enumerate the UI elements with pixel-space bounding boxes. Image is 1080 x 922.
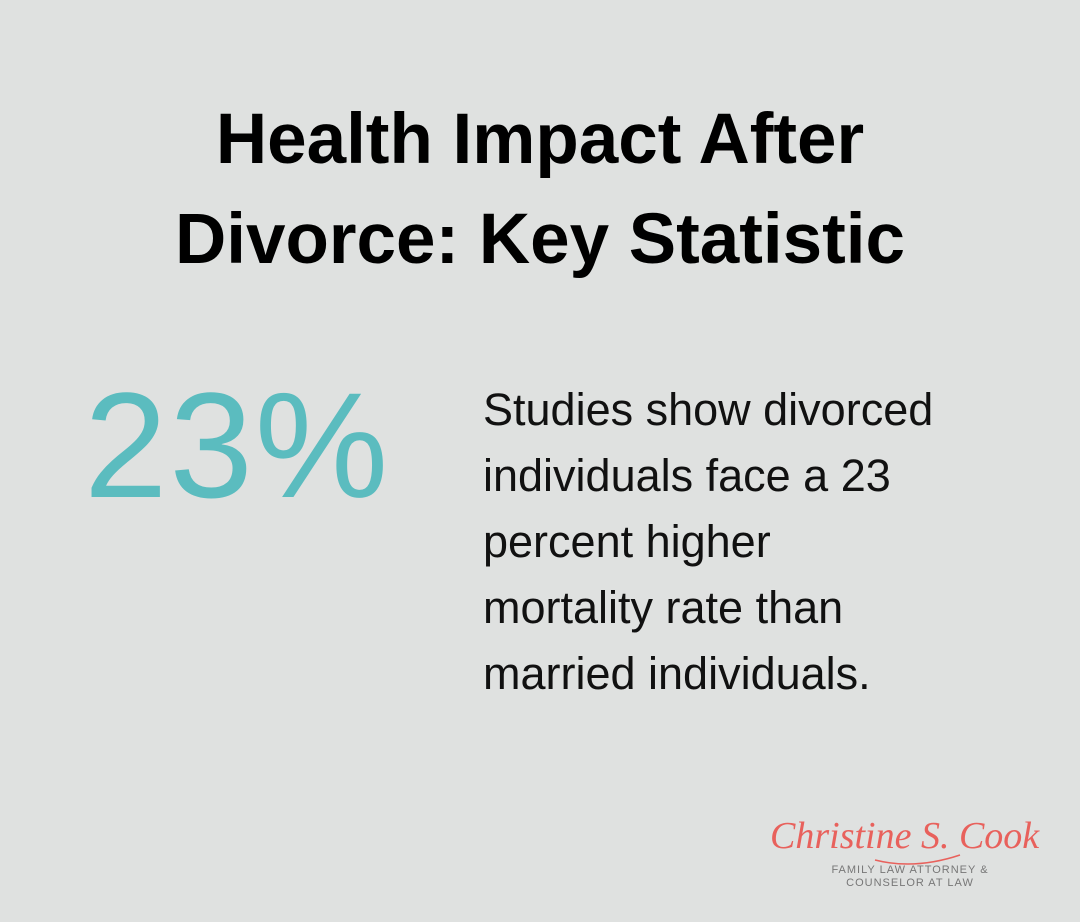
description text: percent higher <box>483 516 771 567</box>
logo <box>770 815 1040 889</box>
description text: married individuals. <box>483 648 871 699</box>
title <box>175 100 905 279</box>
big statistic: 23% <box>84 361 390 529</box>
title: Divorce: Key Statistic <box>175 200 905 279</box>
description text: mortality rate than <box>483 582 843 633</box>
title: Health Impact After <box>216 100 864 179</box>
description text: Studies show divorced <box>483 384 933 435</box>
logo: COUNSELOR AT LAW <box>846 877 974 889</box>
logo: FAMILY LAW ATTORNEY & <box>831 864 989 876</box>
logo: Christine S. Cook <box>770 815 1040 857</box>
description text <box>483 384 933 699</box>
description text: individuals face a 23 <box>483 450 891 501</box>
